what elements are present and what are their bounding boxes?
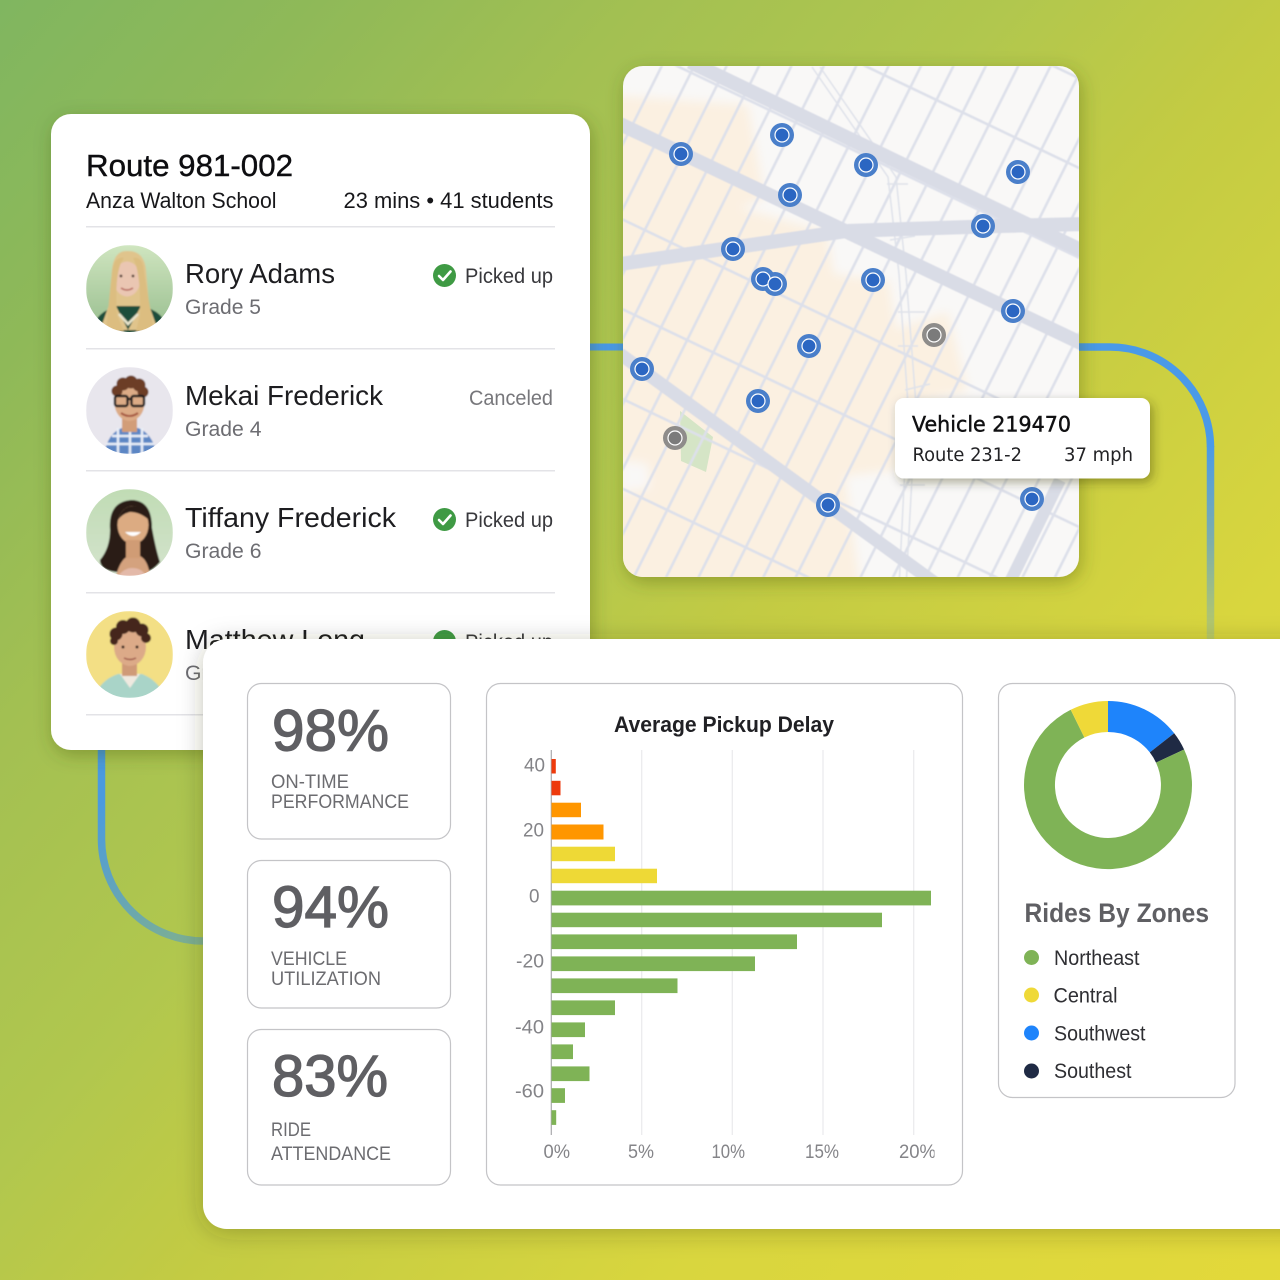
status: Picked up bbox=[465, 509, 553, 532]
y axis labels: 0 bbox=[529, 886, 540, 908]
y axis labels: -20 bbox=[516, 952, 544, 972]
avatar: Rory Adams bbox=[86, 245, 173, 335]
callout: vehicle tooltip bbox=[895, 398, 1150, 478]
y axis labels: -60 bbox=[515, 1082, 544, 1102]
arrow: connector from map to dashboard bbox=[1075, 347, 1210, 642]
stat value: 94% bbox=[272, 875, 389, 940]
status: Picked up bbox=[465, 265, 553, 288]
bar chart bbox=[551, 750, 931, 1135]
panel: rides by zones bbox=[998, 684, 1235, 1098]
student grade: Grade 4 bbox=[185, 418, 262, 441]
student row: Matthew Long bbox=[86, 611, 553, 698]
chart title: Average Pickup Delay bbox=[614, 712, 835, 737]
map pins bbox=[630, 123, 1044, 517]
stat label line 2: ATTENDANCE bbox=[271, 1144, 391, 1165]
chart title: Rides By Zones bbox=[1024, 898, 1209, 928]
student grade: Grade 5 bbox=[185, 296, 261, 319]
arrow: connector from route card to dashboard bbox=[101, 748, 206, 941]
legend: Southwest bbox=[1054, 1022, 1146, 1046]
vehicle name: Vehicle 219470 bbox=[912, 412, 1071, 436]
student row: Mekai Frederick bbox=[86, 367, 553, 454]
icon: picked up check bbox=[433, 630, 456, 653]
x axis labels: 5% bbox=[628, 1142, 654, 1163]
student grade: Grade 7 bbox=[185, 662, 262, 685]
legend: Central bbox=[1054, 984, 1118, 1008]
vehicle route: Route 231-2 bbox=[912, 444, 1022, 466]
panel: on-time performance bbox=[248, 684, 450, 839]
y axis labels: 40 bbox=[524, 756, 545, 776]
student grade: Grade 6 bbox=[185, 540, 262, 563]
y axis labels: 20 bbox=[523, 820, 544, 842]
x axis labels: 20% bbox=[899, 1142, 936, 1163]
avatar: Tiffany Frederick bbox=[86, 489, 173, 576]
stat label: ON-TIME bbox=[271, 772, 349, 793]
avatar: Mekai Frederick bbox=[86, 367, 173, 454]
status: Picked up bbox=[465, 631, 553, 654]
legend bbox=[1024, 947, 1146, 1083]
student name: Rory Adams bbox=[185, 258, 335, 289]
panel: vehicle utilization bbox=[248, 860, 450, 1008]
student name: Mekai Frederick bbox=[185, 380, 384, 411]
x axis labels bbox=[544, 1144, 934, 1158]
panel: map bbox=[610, 62, 1085, 590]
student row: Tiffany Frederick bbox=[86, 489, 553, 576]
y axis labels: -40 bbox=[515, 1018, 544, 1038]
panel: average pickup delay bbox=[486, 684, 962, 1185]
route title: Route 981-002 bbox=[86, 148, 293, 183]
vehicle speed: 37 mph bbox=[1064, 444, 1133, 466]
stat label line 2: PERFORMANCE bbox=[271, 792, 409, 813]
panel: ride attendance bbox=[248, 1030, 450, 1185]
x axis labels: 15% bbox=[805, 1142, 839, 1163]
x axis labels: 0% bbox=[544, 1142, 570, 1163]
donut chart bbox=[1024, 701, 1192, 869]
panel: route card bbox=[51, 114, 590, 750]
icon: picked up check bbox=[433, 264, 456, 287]
legend: Southest bbox=[1054, 1060, 1132, 1083]
school name: Anza Walton School bbox=[86, 188, 276, 213]
stat label: VEHICLE bbox=[271, 949, 347, 970]
student name: Tiffany Frederick bbox=[185, 502, 397, 533]
stat value: 98% bbox=[272, 698, 389, 764]
student row: Rory Adams bbox=[86, 245, 553, 335]
arrow: connector from route card to map bbox=[589, 344, 625, 350]
stat label line 2: UTILIZATION bbox=[271, 969, 381, 990]
status: Canceled bbox=[469, 387, 553, 410]
panel: analytics dashboard bbox=[203, 639, 1280, 1229]
stat value: 83% bbox=[272, 1044, 388, 1109]
route stats: 23 mins • 41 students bbox=[344, 188, 554, 213]
stat label: RIDE bbox=[271, 1120, 311, 1141]
avatar: Matthew Long bbox=[86, 611, 173, 698]
student name: Matthew Long bbox=[185, 624, 365, 655]
legend: Northeast bbox=[1054, 947, 1140, 970]
y axis labels bbox=[515, 756, 545, 1102]
icon: picked up check bbox=[433, 508, 456, 531]
x axis labels: 10% bbox=[712, 1142, 745, 1163]
